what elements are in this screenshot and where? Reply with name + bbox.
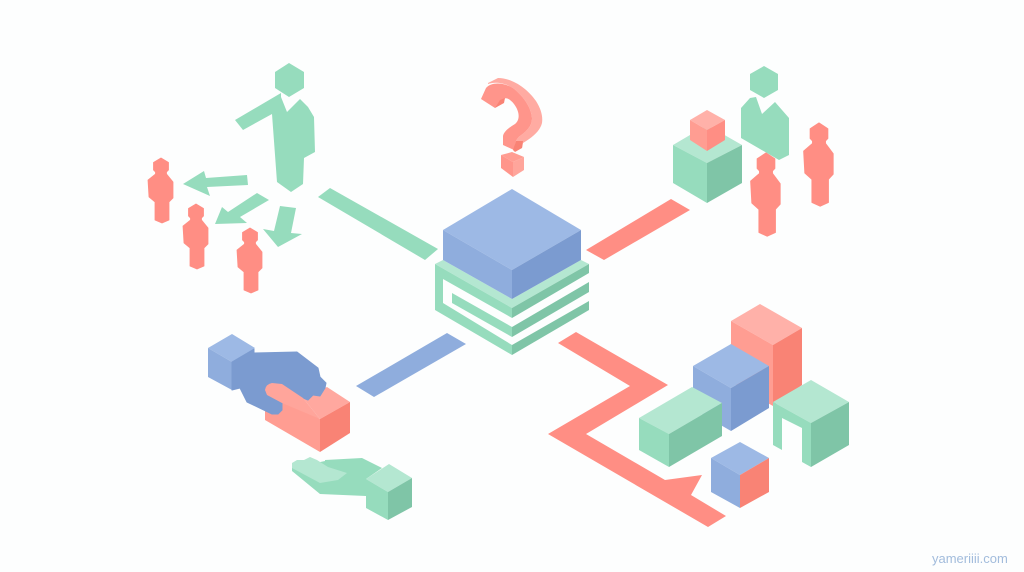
icon: blue hand [232,349,326,414]
green layered base [435,260,589,355]
panel: central stacked platform [435,189,589,355]
icon: green cube [366,464,412,520]
icon: green manager figure pointing [235,63,315,192]
arrow: to left person [183,171,248,196]
icon: long green block [639,387,722,467]
icon: red box [265,387,350,452]
red thumb [265,383,320,419]
icon: blue cube [208,334,255,390]
panel: hands exchanging block [208,334,412,520]
icon: green hand [292,457,382,496]
panel: cube with team [673,66,833,236]
icon: red person front [751,153,780,236]
icon: red person left [148,158,173,223]
side face [488,78,542,150]
panel: path to building blocks [548,304,849,527]
icon: question mark [481,78,542,177]
stem shadow [513,141,523,152]
question mark dot [501,152,524,177]
icon: green arch block [773,380,849,467]
icon: red cube [690,110,725,151]
icon: blue block [693,344,769,431]
blue top block [443,189,581,299]
arrow: red zigzag path [548,332,726,527]
icon: green manager figure [741,66,789,160]
inner shadow [495,98,505,108]
front face [481,84,532,150]
icon: red person middle [183,204,208,269]
connector: red bar [586,199,690,260]
connector: blue bar [356,333,466,397]
icon: green cube [673,125,742,203]
connector: green bar [318,188,438,260]
icon: red person right [237,228,262,293]
watermark: yameriiii.com [932,551,1008,566]
arrow: to right person [263,206,302,247]
icon: tall red block [731,304,802,406]
icon: small blue and red cube [711,442,769,508]
panel: manager directing team [148,63,315,293]
arrow: to middle person [215,193,269,224]
icon: red person back [804,123,833,206]
